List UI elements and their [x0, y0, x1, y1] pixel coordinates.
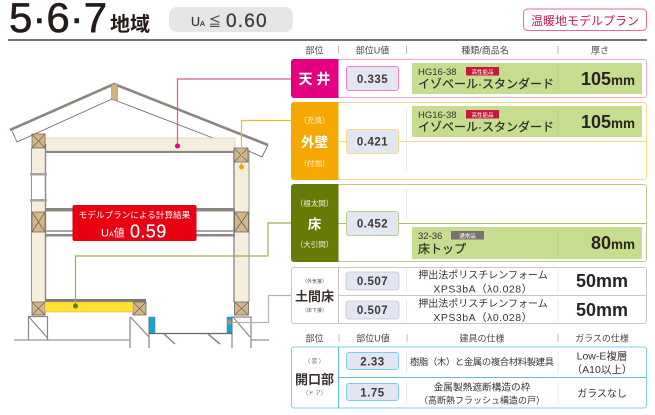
panel: earth floor [292, 268, 646, 324]
foundation [14, 316, 269, 348]
wall product [412, 106, 642, 137]
table header: insulation: 部位 [305, 44, 324, 56]
panel: floor [291, 184, 646, 262]
leader line: earth floor [226, 296, 291, 325]
wall label: 外壁 [301, 134, 328, 150]
earth floor row 2: XPS3bA（λ0.028） [433, 312, 533, 324]
earth floor row 1: 50mm [576, 271, 628, 291]
UA standard badge: UA ≦ [191, 14, 221, 29]
ceiling product: 105mm [581, 69, 635, 89]
plan label [524, 9, 646, 30]
table header: insulation: 種類/商品名 [461, 44, 509, 56]
door row: 1.75 [360, 388, 385, 400]
earth floor row 2: 押出法ポリスチレンフォーム [418, 297, 548, 310]
table header: insulation: 部位U値 [356, 44, 389, 56]
earth floor row 2: 50mm [576, 300, 628, 320]
right wall [234, 150, 249, 302]
panel: ceiling [291, 59, 646, 98]
floor label: （大引間） [296, 239, 333, 249]
earth floor label: （床下接） [302, 307, 327, 314]
leader line: floor [73, 223, 291, 308]
earth floor row 2 [346, 297, 628, 324]
earth floor row 1: 0.507 [357, 276, 388, 288]
wall label [291, 102, 338, 180]
openings label: （ド ア） [303, 390, 326, 397]
table header: openings: 建具の仕様 [459, 332, 505, 344]
ceiling product: 高性能品 [471, 68, 494, 76]
title [9, 0, 150, 41]
second floor beams [45, 208, 235, 236]
earth floor row 1: XPS3bA（λ0.028） [433, 284, 533, 296]
ceiling U value [346, 66, 398, 90]
floor product [412, 227, 642, 259]
earth floor row 2: 0.507 [357, 305, 388, 317]
wall product: イゾベール·スタンダード [418, 119, 554, 134]
perimeter insulation [149, 317, 232, 333]
openings label [295, 357, 334, 397]
timber posts [32, 134, 248, 315]
floor product: 80mm [591, 233, 635, 253]
earth floor row 1 [346, 268, 628, 296]
floor U value [346, 212, 398, 236]
ceiling product [412, 63, 642, 94]
openings label: （ 窓 ） [305, 357, 324, 365]
ceiling label: 天 井 [299, 71, 330, 87]
openings label: 開口部 [295, 372, 334, 387]
earth floor label: 土間床 [295, 289, 334, 304]
table header: openings [305, 332, 629, 344]
table header: openings: ガラスの仕様 [575, 332, 629, 344]
table header: insulation: 厚さ [591, 46, 609, 56]
callout: calculation result: モデルプランによる計算結果 [79, 209, 191, 220]
wall product: HG16-38 [418, 110, 457, 121]
panel: wall [291, 102, 646, 180]
floor label [291, 184, 338, 262]
ceiling product: イゾベール·スタンダード [418, 76, 554, 91]
door row: 金属製熱遮断構造の枠 [434, 380, 531, 394]
wall U value: 0.421 [357, 136, 388, 148]
table header: openings: 部位U値 [356, 332, 390, 344]
wall product: 105mm [581, 112, 635, 132]
UA standard badge: 0.60 [226, 11, 268, 32]
plan label: 温暖地モデルプラン [531, 13, 639, 28]
floor product: 32-36 [418, 231, 442, 242]
earth floor label [295, 278, 334, 314]
wall label: （充填） [300, 115, 330, 125]
title: 地域 [110, 13, 150, 36]
floor product: 通常品 [459, 232, 476, 240]
ceiling U value: 0.335 [357, 74, 388, 86]
leader line: ceiling [175, 79, 291, 148]
floor label: （根太間） [296, 198, 333, 208]
roof [10, 84, 268, 157]
floor U value: 0.452 [357, 218, 388, 230]
door row: （高断熱フラッシュ構造の戸） [419, 394, 545, 406]
header rule [8, 39, 647, 41]
window row: 樹脂（木）と金属の複合材料製建具 [410, 356, 554, 367]
wall U value [346, 130, 398, 154]
wall label: （付加） [300, 158, 330, 168]
callout: calculation result: 0.59 [130, 222, 167, 242]
door row [346, 380, 627, 406]
window row [346, 350, 632, 376]
floor product: 床トップ [418, 242, 466, 256]
table header: openings: 部位 [305, 332, 324, 344]
window row: Low-E複層 [577, 350, 627, 362]
door row: ガラスなし [577, 388, 627, 400]
left wall [30, 144, 47, 302]
UA standard badge [169, 7, 293, 32]
panel: openings [292, 347, 646, 408]
wall product: 高性能品 [471, 111, 494, 119]
floor label: 床 [308, 217, 322, 232]
callout: calculation result: UA値 [101, 226, 125, 240]
window row: 2.33 [360, 356, 385, 368]
ceiling label [291, 59, 338, 98]
house cross-section [10, 84, 269, 348]
window row: （A10以上） [572, 364, 632, 376]
ceiling product: HG16-38 [418, 67, 457, 78]
earth floor insulation [45, 299, 146, 312]
ceiling insulation [45, 138, 235, 153]
table header: insulation [305, 44, 609, 56]
earth floor row 1: 押出法ポリスチレンフォーム [418, 268, 548, 282]
leader line: wall [239, 120, 291, 170]
callout: calculation result [72, 205, 196, 242]
earth floor label: （外気接） [302, 278, 327, 285]
